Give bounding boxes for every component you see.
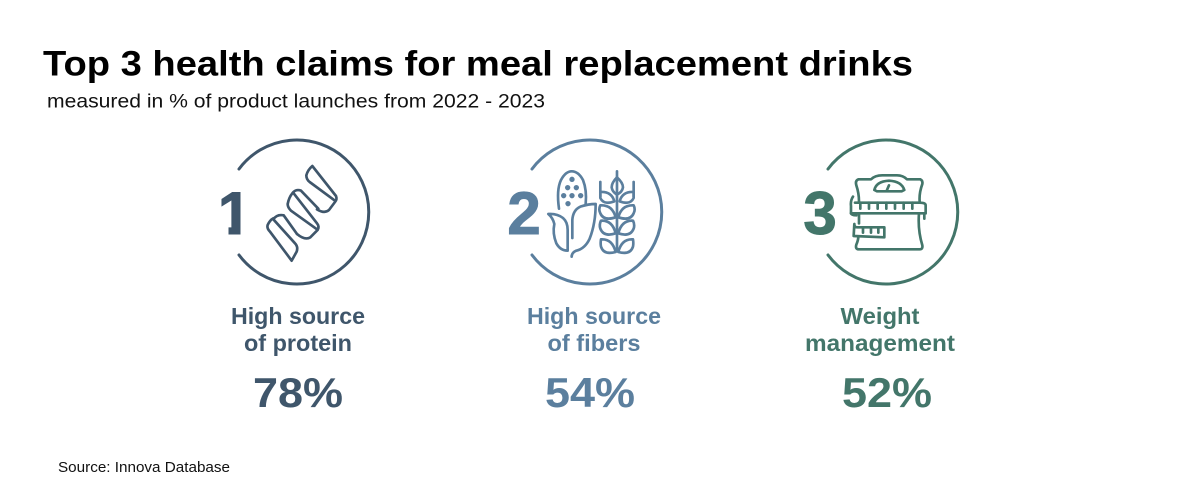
label: of fibers xyxy=(548,330,640,356)
panel: high source of protein xyxy=(218,140,369,416)
circle outline 2 xyxy=(532,140,662,284)
circle outline 1 xyxy=(239,140,369,284)
wheat xyxy=(599,171,635,253)
rank number 3: 3 xyxy=(803,180,837,247)
title: Top 3 health claims for meal replacement drinks xyxy=(43,44,913,84)
icon: DNA helix xyxy=(267,166,336,261)
value: 78% xyxy=(253,369,343,416)
icon: scale and measuring tape xyxy=(851,175,926,249)
value: 54% xyxy=(545,369,635,416)
label: High source xyxy=(231,303,365,329)
panel: weight management xyxy=(803,140,958,416)
source note: Source: Innova Database xyxy=(58,460,230,476)
panel: high source of fibers xyxy=(507,140,662,416)
label: Weight xyxy=(840,303,920,329)
circle outline 3 xyxy=(828,140,958,284)
corn xyxy=(548,171,596,257)
subtitle: measured in % of product launches from 2022 - 2023 xyxy=(47,90,545,112)
value: 52% xyxy=(842,369,932,416)
label: of protein xyxy=(244,330,352,356)
rank number 2: 2 xyxy=(507,180,541,247)
label: management xyxy=(805,330,955,356)
label: High source xyxy=(527,303,661,329)
icon: corn and wheat xyxy=(548,171,635,257)
rank number 1: 1 xyxy=(218,180,251,247)
